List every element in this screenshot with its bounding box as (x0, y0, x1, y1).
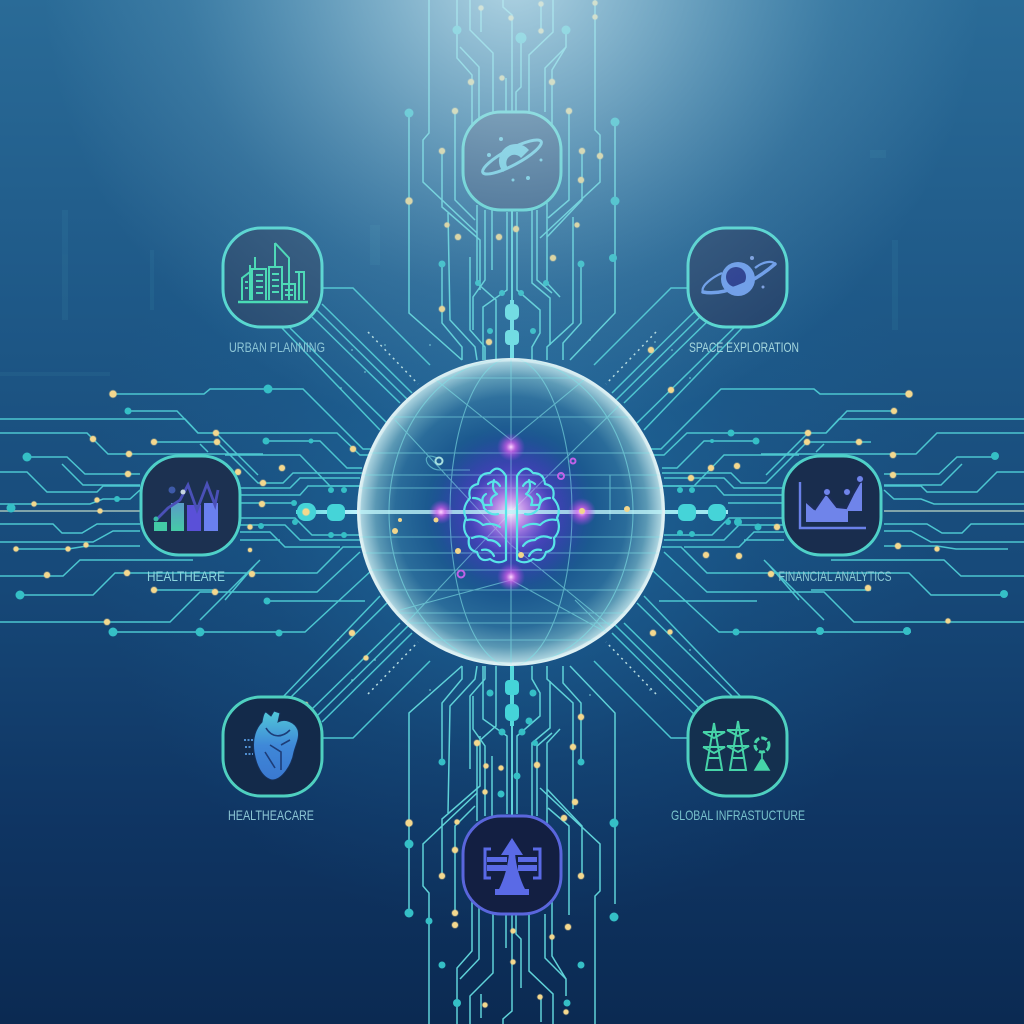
label: healthcare (left): HEALTHEARE (147, 568, 225, 584)
circuit traces: diagonal lower right (594, 596, 742, 738)
icon tile: market chart (left) (141, 456, 240, 555)
sphere inner nodes (392, 506, 630, 558)
top light haze overlay (0, 0, 1024, 440)
brain icon (464, 469, 559, 562)
circuit traces: diagonal upper left (282, 288, 430, 430)
horizontal light flare (360, 510, 662, 514)
small stars (487, 137, 542, 182)
sphere ring nodes (436, 458, 576, 578)
planet ring outer (703, 264, 775, 293)
horizontal light beams (296, 300, 728, 726)
circuit traces: diagonal upper right (594, 288, 742, 430)
satellite base (495, 889, 529, 895)
line nodes (824, 476, 864, 496)
heart vessels (265, 728, 290, 770)
icon tile: space exploration (top) (463, 112, 561, 210)
stars (750, 256, 764, 288)
central glass sphere (340, 358, 680, 666)
circuit traces: bottom (409, 666, 615, 1024)
sphere rim highlight (359, 360, 663, 664)
label: global infrastructure: GLOBAL INFRASTUCTURE (671, 807, 805, 823)
trend nodes (154, 486, 186, 522)
bar chart (154, 503, 218, 531)
icon tile: heart (223, 697, 322, 796)
label: financial analytics: FINANCIAL ANALYTICS (778, 568, 892, 584)
circuit traces: right (644, 389, 1024, 632)
label: urban planning: URBAN PLANNING (229, 339, 325, 355)
planet ring (479, 134, 545, 180)
left hemisphere (464, 469, 506, 562)
line (806, 480, 861, 509)
heart tick marks (244, 740, 253, 754)
circuit traces: left (0, 389, 380, 632)
icon tile: global infrastructure (688, 697, 787, 796)
capsule nodes (297, 304, 726, 721)
area (806, 480, 862, 522)
planet ring inner (703, 262, 775, 292)
icon tile: urban planning (223, 228, 322, 327)
central glow (436, 437, 586, 587)
circuit traces: diagonal lower left (282, 596, 430, 738)
sphere latitude and longitude grid (360, 359, 662, 665)
pylons (703, 721, 749, 770)
gear (755, 738, 769, 752)
icon tile: space exploration (right) (688, 228, 787, 327)
icon tile: satellite (463, 816, 561, 914)
city skyline (238, 243, 308, 302)
label: healthcare (lower): HEALTHEACARE (228, 807, 314, 823)
satellite top (501, 838, 523, 855)
label: space exploration: SPACE EXPLORATION (689, 339, 799, 355)
dust particles around sphere (337, 339, 691, 696)
heart (253, 711, 299, 780)
magenta sparks (429, 433, 596, 591)
gear base (755, 752, 769, 770)
solar panels (487, 857, 537, 871)
planet (721, 262, 755, 296)
right hemisphere (517, 469, 559, 562)
icon tile: financial analytics (783, 456, 881, 555)
axis (800, 482, 866, 528)
trend line (156, 484, 218, 520)
satellite body (498, 853, 526, 891)
circuit traces: top (409, 0, 615, 360)
planet crescent (499, 144, 529, 172)
faint background data bars (0, 150, 898, 376)
brackets (485, 849, 540, 878)
